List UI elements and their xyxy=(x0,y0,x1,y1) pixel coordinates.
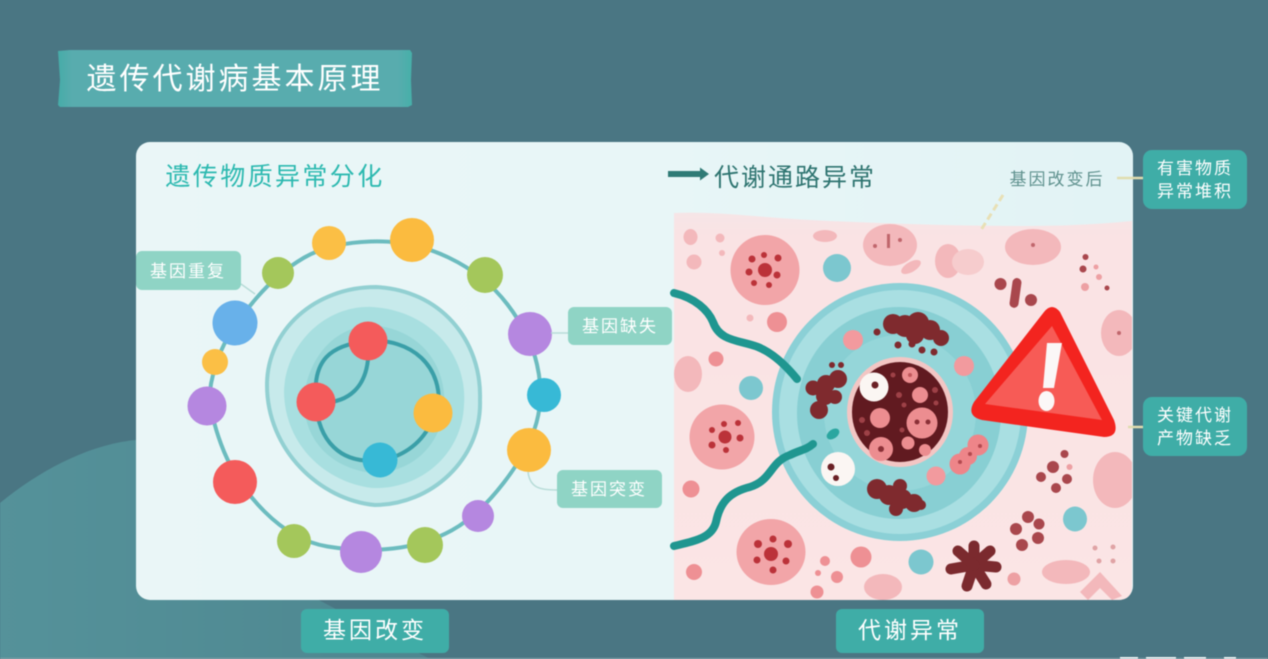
label: harmful substance accumulation: 有害物质 xyxy=(1157,159,1233,178)
label: gene change: 基因改变 xyxy=(323,617,427,643)
teal spheres xyxy=(739,254,1087,574)
pink peanut organelle xyxy=(950,434,988,474)
label: gene duplication: 基因重复 xyxy=(150,262,226,281)
connector: gene mutation xyxy=(528,472,557,490)
label: gene mutation: 基因突变 xyxy=(571,480,647,499)
nucleus xyxy=(847,357,953,467)
tissue illustration: metabolic abnormality xyxy=(674,205,1137,601)
label: gene deletion: 基因缺失 xyxy=(582,317,658,336)
title: 遗传代谢病基本原理 xyxy=(86,63,384,96)
label: gene deletion xyxy=(568,307,672,345)
icon: warning triangle xyxy=(971,307,1116,437)
connector: key product deficiency xyxy=(1128,426,1143,428)
label: metabolic abnormality xyxy=(836,609,984,653)
dashed connector from caption xyxy=(981,195,1003,230)
label: gene change xyxy=(301,609,449,653)
arrow: left to right heading xyxy=(668,168,709,180)
title xyxy=(58,50,412,107)
connector: gene duplication xyxy=(241,284,255,294)
caption: after gene change: 基因改变后 xyxy=(1010,170,1104,189)
label: key metabolite deficiency: 产物缺乏 xyxy=(1157,429,1233,448)
label: gene duplication xyxy=(136,251,241,290)
wavy vessels xyxy=(674,293,813,546)
label: harmful substance accumulation xyxy=(1143,150,1247,209)
label: key metabolite deficiency: 关键代谢 xyxy=(1157,406,1233,425)
central cell xyxy=(267,287,480,505)
heading: metabolic pathway abnormal: 代谢通路异常 xyxy=(714,164,876,192)
pink cells with dark nuclei xyxy=(690,235,806,585)
panel: main illustration xyxy=(136,142,1137,601)
label: key metabolite deficiency xyxy=(1143,397,1247,456)
label: metabolic abnormality: 代谢异常 xyxy=(858,617,962,643)
connector: harmful accumulation xyxy=(1117,177,1143,179)
connector: gene deletion xyxy=(551,332,568,334)
dark asterisk cell xyxy=(951,546,996,586)
heading: genetic material differentiation: 遗传物质异常分化 xyxy=(165,163,385,191)
white cell xyxy=(821,452,855,486)
large cell with nucleus xyxy=(772,283,1028,541)
label: harmful substance accumulation: 异常堆积 xyxy=(1157,182,1233,201)
chromosome ring diagram xyxy=(188,218,561,573)
label: gene mutation xyxy=(557,470,662,508)
dark organelles xyxy=(806,312,949,516)
